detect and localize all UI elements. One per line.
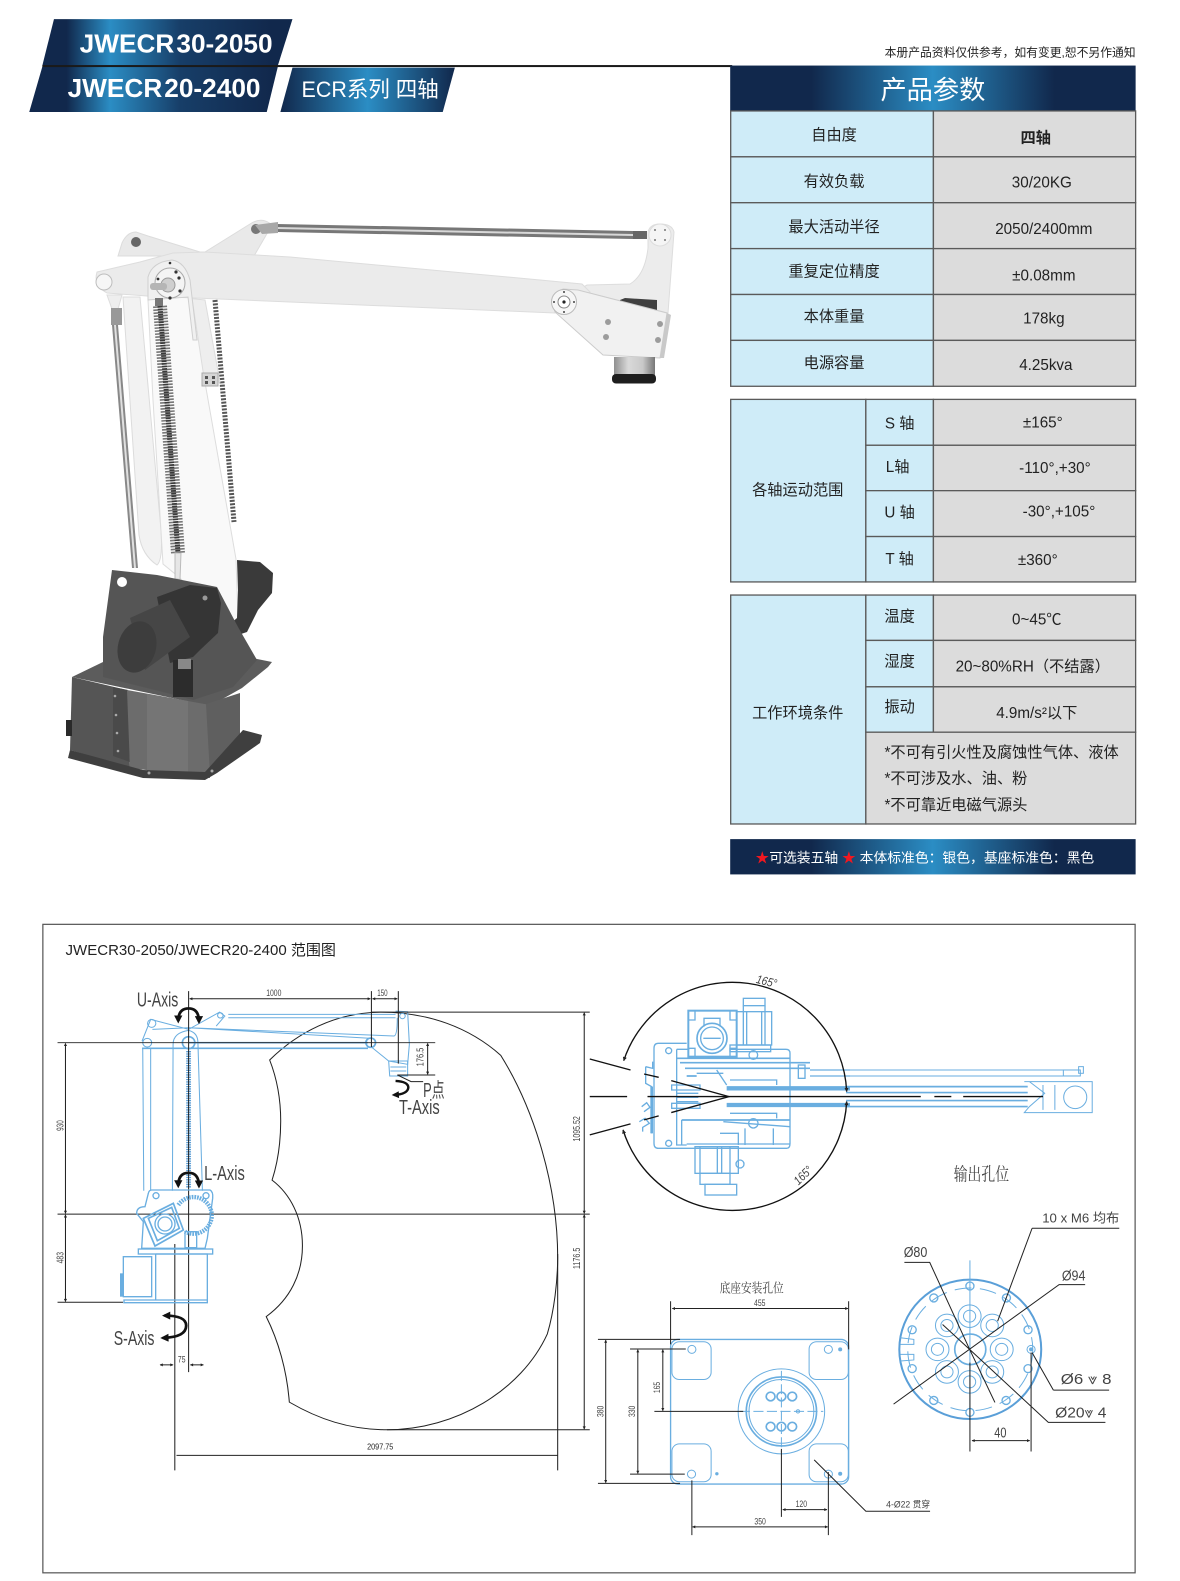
end bracket cap <box>649 224 671 246</box>
optional axis banner <box>730 839 1136 874</box>
shoulder hub <box>150 262 185 300</box>
flange labels <box>904 1211 1119 1441</box>
top view rotation range <box>590 972 1092 1210</box>
front face band <box>147 694 188 776</box>
axis motion range: T 轴 <box>885 551 914 568</box>
flange labels: Ø6 ⩔ 8 <box>1061 1372 1111 1388</box>
wrist plate <box>552 289 667 358</box>
U-Axis arrow <box>178 1008 199 1022</box>
base dimensions values <box>596 1298 930 1527</box>
base dimensions values: 380 <box>596 1406 606 1417</box>
support block <box>202 373 218 386</box>
basic parameters rows: 重复定位精度 <box>788 263 880 280</box>
flange labels: Ø80 <box>904 1245 927 1261</box>
output flange view <box>894 1211 1119 1452</box>
horizontal arm <box>96 252 590 313</box>
axis motion range: ±360° <box>1018 552 1058 569</box>
rear arm plate <box>186 298 220 382</box>
model band 20-2400 <box>29 67 278 112</box>
working environment: *不可涉及水、油、粉 <box>884 771 1027 788</box>
basic parameters rows: 30/20KG <box>1012 175 1072 192</box>
base dimensions values: 350 <box>754 1517 766 1527</box>
wrist plate side <box>660 313 671 358</box>
base bolts <box>114 695 214 775</box>
end bracket <box>578 224 674 313</box>
model band 30-2050 <box>42 19 292 66</box>
angle label top: 165° <box>755 972 779 991</box>
model band 30-2050: JWECR30-2050 <box>80 28 273 58</box>
working environment: 4.9m/s²以下 <box>996 705 1077 722</box>
dimension values: 1000 <box>266 988 281 999</box>
pull rod <box>107 295 138 568</box>
plate hole <box>117 577 127 587</box>
optional axis banner: ★可选装五轴 ★ 本体标准色：银色，基座标准色：黑色 <box>755 849 1094 865</box>
panel border <box>43 924 1135 1573</box>
plate bolts <box>603 319 663 343</box>
dimension values: 483 <box>55 1252 66 1263</box>
axis motion range: U 轴 <box>884 504 915 521</box>
foot plate <box>68 730 262 780</box>
width dimension 2097.75: 2097.75 <box>367 1441 394 1451</box>
basic parameters rows: ±0.08mm <box>1012 267 1076 284</box>
robot side profile <box>142 1011 409 1191</box>
axis labels: T-Axis <box>399 1098 440 1119</box>
series band <box>280 68 455 112</box>
working environment: 工作环境条件 <box>752 704 843 722</box>
dimension arrows <box>65 999 584 1429</box>
base title: 底座安装孔位 <box>720 1279 784 1295</box>
dark wrist box <box>620 298 657 313</box>
flange <box>614 357 655 377</box>
base dimensions values: 330 <box>627 1406 637 1417</box>
base dimension arrows <box>606 1309 848 1527</box>
page header bands <box>29 19 732 112</box>
side plate <box>103 570 257 700</box>
rotation arcs <box>590 982 1043 1210</box>
working environment: 温度 <box>884 608 915 625</box>
axis labels: L-Axis <box>204 1163 245 1185</box>
wrist pivot <box>552 290 577 315</box>
table heading <box>730 66 1136 111</box>
basic parameters rows: 最大活动半径 <box>788 219 880 236</box>
main vertical arm <box>148 285 238 628</box>
blue forearm <box>846 1067 1092 1113</box>
side view and working range <box>55 988 590 1470</box>
main spring <box>155 298 182 589</box>
axis labels: S-Axis <box>114 1328 154 1350</box>
base pedestal column strip <box>113 687 130 762</box>
top view mechanism <box>639 998 850 1195</box>
workspace outline <box>266 1012 558 1430</box>
basic parameters rows: 电源容量 <box>804 355 865 372</box>
range diagram panel <box>43 924 1135 1573</box>
header rule <box>42 65 732 67</box>
base mounting holes view <box>596 1279 930 1535</box>
axis motion range: S 轴 <box>885 416 914 433</box>
basic parameters rows: 178kg <box>1023 311 1065 328</box>
flange labels: 10 x M6 均布 <box>1042 1211 1119 1226</box>
front motor <box>112 585 221 677</box>
dimension values: 176.5 <box>415 1048 427 1066</box>
output hole title: 输出孔位 <box>954 1165 1009 1184</box>
rear triangular link <box>118 220 272 256</box>
working environment: 0~45℃ <box>1012 611 1062 628</box>
base plate outline <box>671 1339 849 1484</box>
dimension values: 75 <box>178 1355 186 1365</box>
axis motion range: -30°,+105° <box>1023 503 1095 520</box>
series band: ECR系列 四轴 <box>302 77 439 102</box>
basic parameters rows: 本体重量 <box>804 309 865 326</box>
flange labels: 40 <box>994 1425 1006 1441</box>
axis labels: P点 <box>423 1079 445 1102</box>
table heading: 产品参数 <box>880 75 985 105</box>
axis motion range: ±165° <box>1023 415 1063 432</box>
flange leaders <box>894 1228 1119 1452</box>
dimension values <box>55 988 583 1365</box>
front arm plate cap <box>148 260 197 340</box>
base pedestal left face <box>70 677 130 768</box>
dimension values: 150 <box>377 988 388 999</box>
T-Axis arrow <box>394 1081 408 1095</box>
side view robot base <box>120 1190 213 1303</box>
basic parameters rows: 自由度 <box>811 127 857 144</box>
basic parameters rows: 四轴 <box>1021 129 1051 147</box>
base dimensions values: 165 <box>652 1382 662 1393</box>
dimension values: 930 <box>55 1120 66 1131</box>
base dimensions values: 455 <box>754 1298 766 1308</box>
base reference lines <box>598 1301 930 1535</box>
working environment: *不可有引火性及腐蚀性气体、液体 <box>884 743 1119 761</box>
axis motion range <box>731 399 1136 582</box>
axis labels <box>114 990 445 1350</box>
base pedestal right face <box>206 693 240 775</box>
base top plate <box>72 657 272 706</box>
base dimensions values: 4-Ø22 贯穿 <box>886 1498 930 1509</box>
side motor <box>200 560 273 650</box>
dimension values: 1176.5 <box>572 1248 583 1269</box>
cable connector <box>66 720 72 736</box>
basic parameters rows: 4.25kva <box>1019 357 1073 374</box>
basic parameters rows: 2050/2400mm <box>995 221 1092 238</box>
reference lines <box>58 991 590 1470</box>
working environment <box>731 595 1136 824</box>
axis motion range: -110°,+30° <box>1019 460 1091 477</box>
working environment: 20~80%RH（不结露） <box>956 659 1110 676</box>
axis labels: U-Axis <box>137 990 178 1012</box>
black gripper ring <box>612 374 656 384</box>
model band 20-2400: JWECR20-2400 <box>68 73 261 103</box>
basic parameters rows <box>731 111 1136 386</box>
robot photo illustration <box>66 220 674 780</box>
flange circles <box>899 1260 1041 1419</box>
flange labels: Ø94 <box>1062 1268 1085 1284</box>
axis motion range: 各轴运动范围 <box>752 482 843 499</box>
working environment: 振动 <box>884 699 915 716</box>
angle label bottom: 165° <box>791 1163 816 1188</box>
top rod <box>255 222 647 239</box>
L-Axis arrow <box>178 1173 199 1186</box>
left pivot <box>96 274 112 290</box>
S-Axis arrow <box>163 1316 186 1338</box>
base pedestal front face <box>127 690 210 778</box>
product parameter table <box>730 66 1136 874</box>
thin rear spring <box>215 300 234 522</box>
axis motion range: L轴 <box>886 459 909 476</box>
dimension values: 1095.52 <box>572 1116 583 1142</box>
panel title: JWECR30-2050/JWECR20-2400 范围图 <box>66 942 336 959</box>
basic parameters rows: 有效负载 <box>804 174 865 191</box>
mounting bracket opening <box>173 659 193 697</box>
working environment: 湿度 <box>884 654 915 671</box>
flange labels: Ø20⩔ 4 <box>1055 1406 1106 1422</box>
base dimensions values: 120 <box>796 1499 807 1509</box>
disclaimer note: 本册产品资料仅供参考，如有变更,恕不另作通知 <box>885 45 1136 59</box>
working environment: *不可靠近电磁气源头 <box>884 797 1027 814</box>
rear vertical link <box>123 297 162 565</box>
